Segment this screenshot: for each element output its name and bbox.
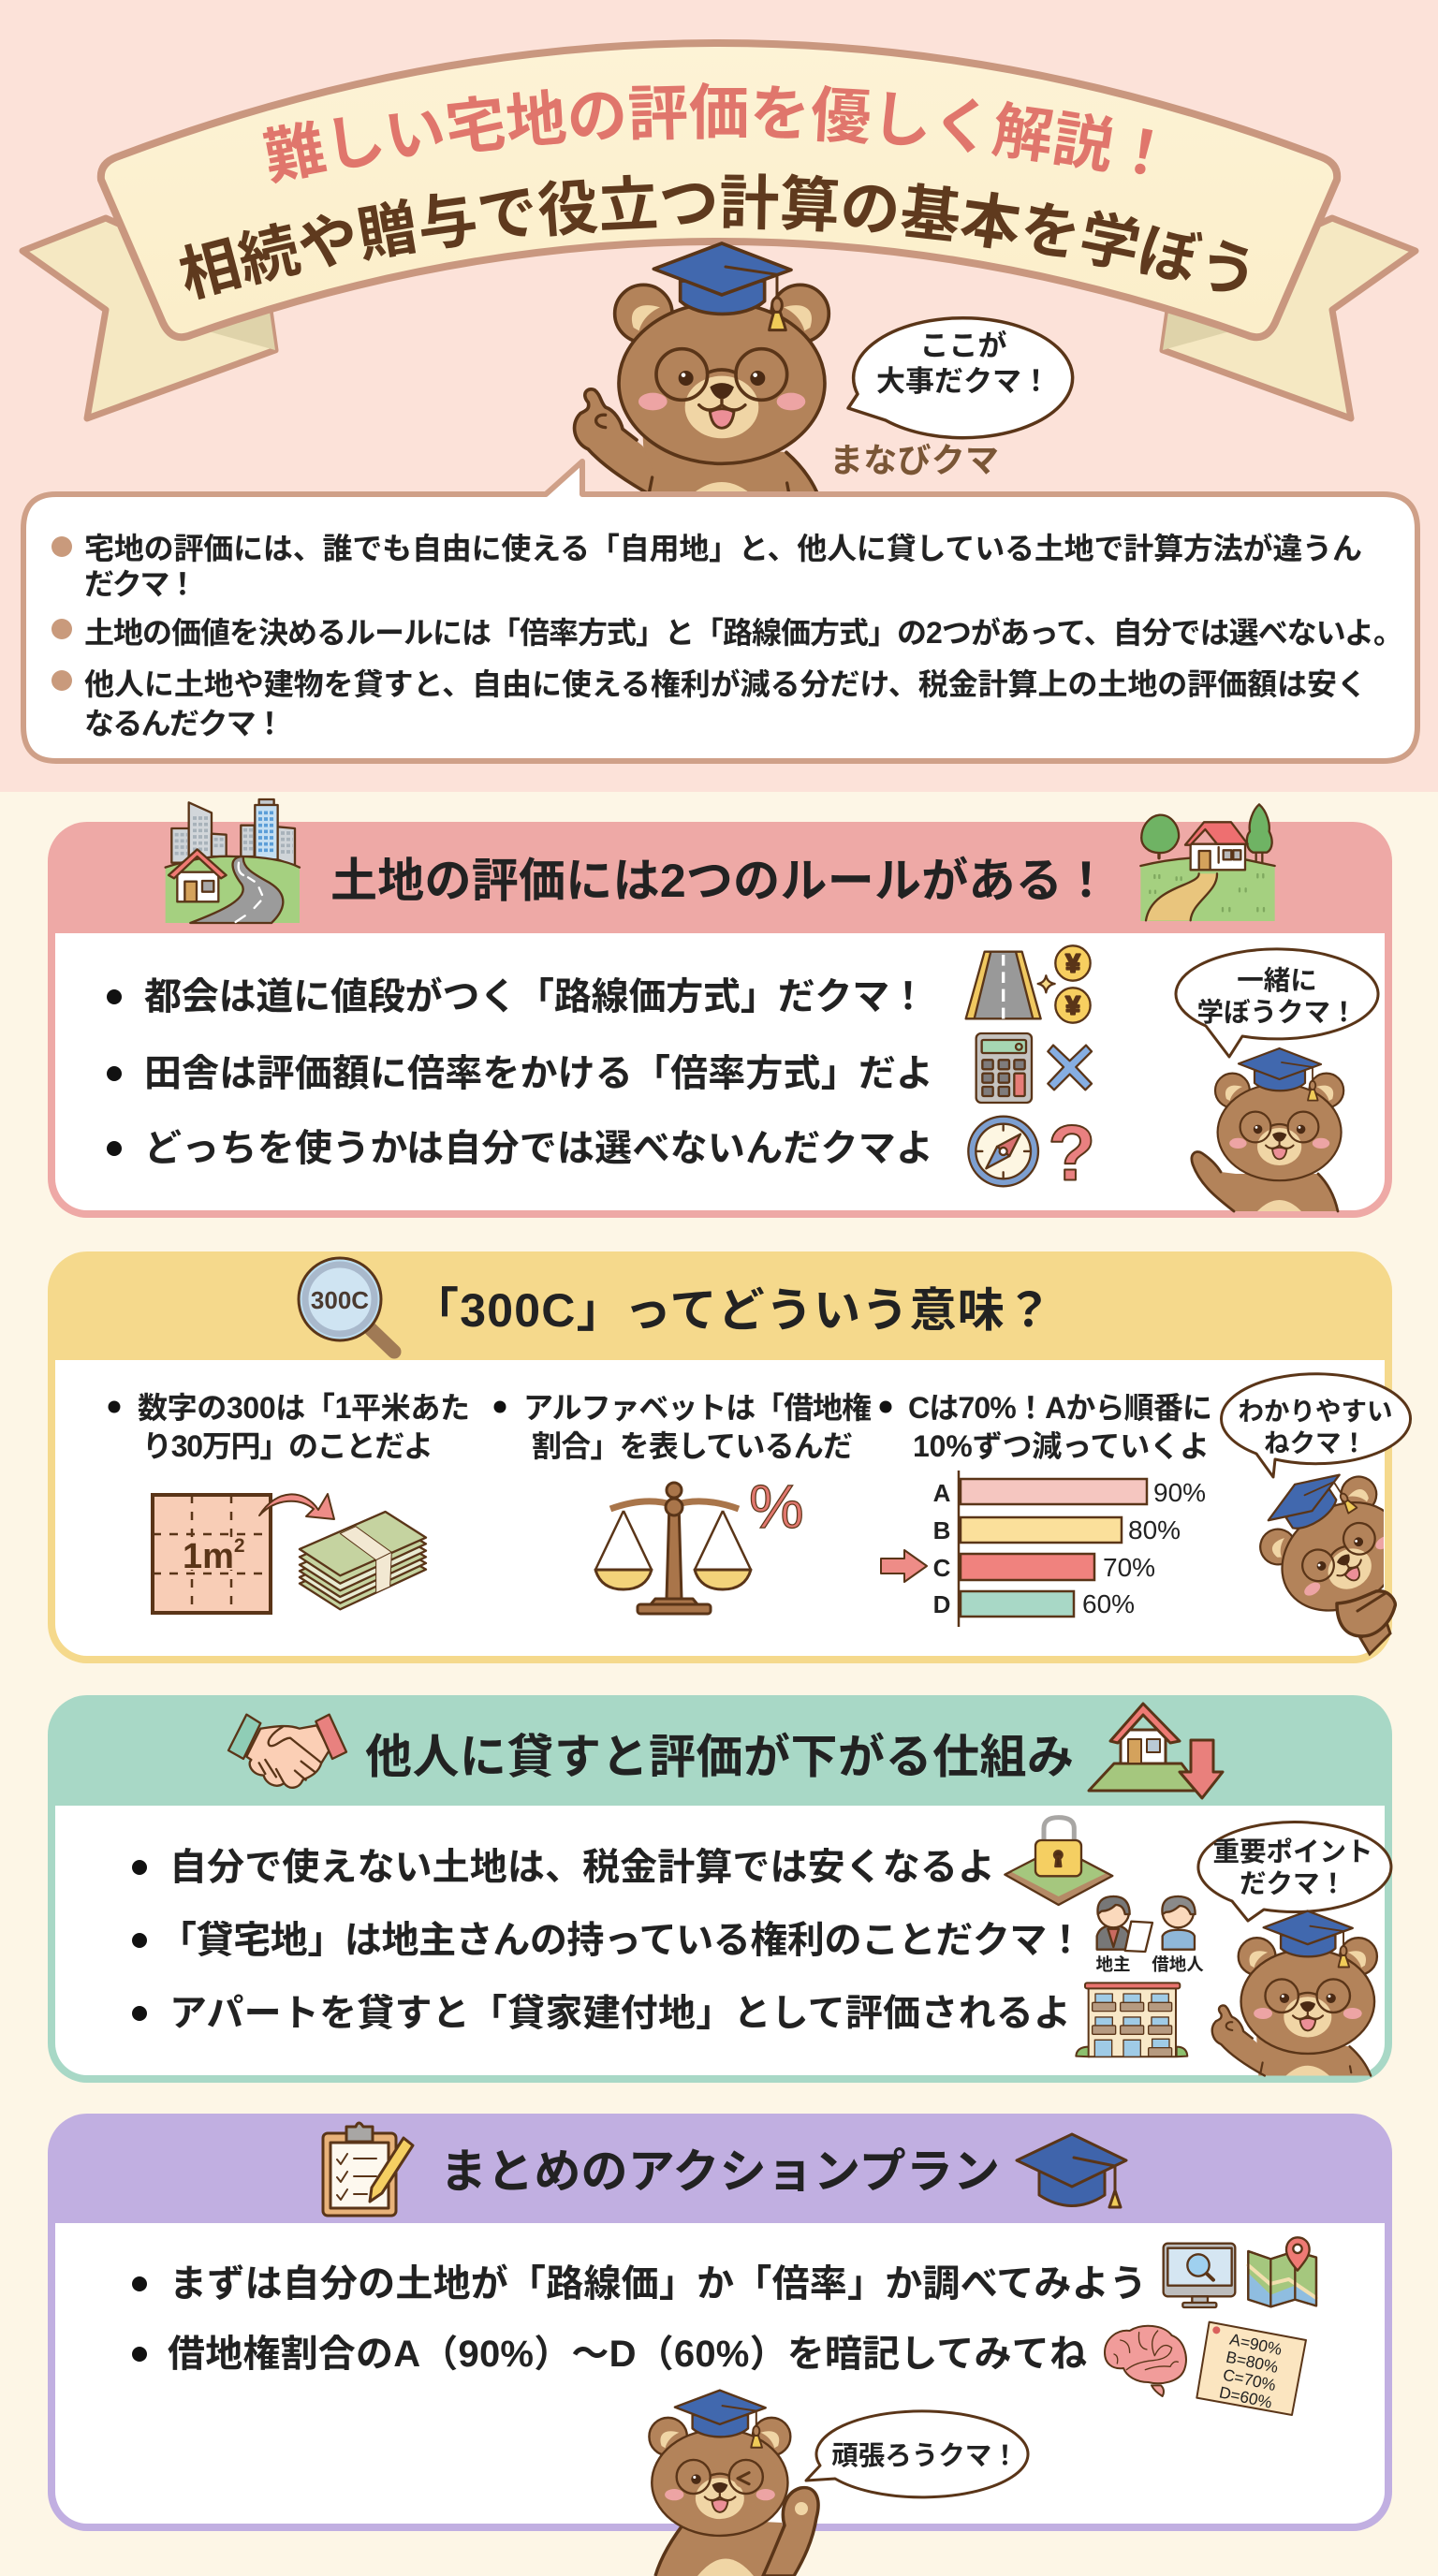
icon: memo note: D=60% [1217, 2382, 1274, 2412]
column: ratio chart: 10%ずつ減っていくよ [913, 1429, 1210, 1463]
icon: memo note: C=70% [1221, 2365, 1278, 2394]
banner ribbon [101, 43, 1337, 337]
column: 1 square metre [109, 1391, 470, 1614]
heading: 「300C」ってどういう意味？ [412, 1284, 1052, 1337]
bar chart [933, 1471, 1206, 1627]
bar chart: A [933, 1479, 951, 1507]
column: ratio chart [880, 1391, 1212, 1627]
mascot: winking bear [649, 2391, 818, 2576]
icon: graduation cap [1017, 2134, 1126, 2207]
bullet list [132, 2263, 1147, 2375]
column: scales: アルファベットは「借地権 [523, 1391, 872, 1425]
speech bubble: わかりやすいねクマ [1222, 1374, 1411, 1477]
icon: memo note [1196, 2322, 1306, 2415]
mascot: waving bear [1192, 1048, 1343, 1211]
icon: house value down [1089, 1704, 1223, 1798]
icon: compass with question mark [968, 1110, 1095, 1197]
heading: 他人に貸すと評価が下がる仕組み [365, 1731, 1074, 1783]
heading: 土地の評価には2つのルールがある！ [330, 855, 1109, 907]
icon: landlord and tenant [1095, 1896, 1204, 1974]
bar chart: 90% [1153, 1478, 1206, 1507]
illustration: square metre: 2 [234, 1535, 245, 1557]
icon: memo note: B=80% [1225, 2348, 1280, 2377]
bullet list: 自分で使えない土地は、税金計算では安くなるよ [169, 1847, 995, 1888]
banner right fold [1163, 292, 1260, 350]
panel header and border [48, 2114, 1392, 2531]
bullet list: 都会は道に値段がつく「路線価方式」だクマ！ [144, 976, 927, 1017]
intro point 3 [51, 667, 1367, 740]
icon: landlord and tenant: 地主 [1095, 1954, 1131, 1974]
icon: map pin [1248, 2237, 1316, 2306]
speech bubble: わかりやすいねクマ: わかりやすい [1238, 1397, 1393, 1426]
banner left tail [22, 218, 275, 418]
title line 1: 難しい宅地の評価を優しく解説！ [262, 82, 1153, 183]
intro point 3: なるんだクマ！ [84, 707, 285, 740]
icon: landlord and tenant: 借地人 [1152, 1954, 1204, 1974]
icon: magnifier 300C [299, 1258, 394, 1352]
icon: percent: % [749, 1471, 804, 1541]
column: scales [494, 1391, 872, 1614]
icon: apartment [1076, 1983, 1187, 2056]
intro point 3: 他人に土地や建物を貸すと、自由に使える権利が減る分だけ、税金計算上の土地の評価額は安く [84, 667, 1367, 701]
icon: memo note: A=90% [1228, 2330, 1284, 2359]
speech bubble: ここが大事だクマ: ここが [919, 329, 1007, 362]
panel body [55, 2223, 1385, 2524]
speech bubble: 重要ポイントだクマ: だクマ！ [1240, 1869, 1346, 1899]
mascot: peeking bear [1259, 1473, 1397, 1657]
bar chart: D [933, 1590, 950, 1618]
panel: action plan [48, 2114, 1392, 2576]
panel header and border [48, 822, 1392, 1218]
bullet list: どっちを使うかは自分では選べないんだクマよ [144, 1128, 933, 1169]
bar chart: 70% [1103, 1553, 1155, 1582]
panel body [55, 1806, 1385, 2075]
bullet list: 田舎は評価額に倍率をかける「倍率方式」だよ [144, 1053, 933, 1094]
mascot name: まなびクマ [829, 441, 999, 479]
speech bubble: 頑張ろうクマ [806, 2411, 1028, 2497]
icon: city [166, 799, 300, 923]
bear raised arm [763, 2488, 818, 2576]
illustration: balance scale [595, 1483, 751, 1614]
bullet list [132, 1847, 1084, 2034]
bar chart: 60% [1082, 1589, 1135, 1618]
bullet list: 借地権割合のA（90%）～D（60%）を暗記してみてね [168, 2334, 1087, 2375]
heading: まとめのアクションプラン [440, 2145, 1000, 2198]
banner right tail [1163, 218, 1416, 418]
icon: handshake [228, 1715, 346, 1788]
bar chart: B [933, 1516, 950, 1544]
speech bubble: ここが大事だクマ [848, 318, 1073, 438]
speech bubble: 頑張ろうクマ: 頑張ろうクマ！ [831, 2441, 1019, 2471]
panel: lending lowers valuation [48, 1695, 1392, 2083]
bullet list: アパートを貸すと「貸家建付地」として評価されるよ [169, 1993, 1071, 2034]
column: 1 square metre: り30万円」のことだよ [142, 1429, 433, 1463]
panel header and border [48, 1251, 1392, 1663]
panel body [55, 1360, 1385, 1656]
speech bubble: 一緒に学ぼうクマ [1176, 949, 1378, 1057]
bullet list: 「貸宅地」は地主さんの持っている権利のことだクマ！ [159, 1920, 1084, 1961]
icon: checklist clipboard [323, 2123, 413, 2216]
title banner [19, 39, 1419, 421]
column: scales: 割合」を表しているんだ [532, 1429, 853, 1463]
mascot: pointing bear [1212, 1910, 1377, 2076]
panel body [55, 933, 1385, 1210]
bullet list: まずは自分の土地が「路線価」か「倍率」か調べてみよう [169, 2263, 1147, 2305]
illustration: square metre [153, 1495, 271, 1614]
mascot: main bear [575, 243, 829, 498]
panel header and border [48, 1695, 1392, 2083]
bullet list [107, 976, 933, 1169]
bar chart: 80% [1128, 1515, 1181, 1544]
arrow: to money [259, 1494, 334, 1519]
speech bubble: 重要ポイントだクマ: 重要ポイント [1212, 1837, 1373, 1867]
panel: 300C meaning [48, 1251, 1424, 1663]
speech bubble: 重要ポイントだクマ [1198, 1822, 1391, 1921]
speech bubble: 一緒に学ぼうクマ: 一緒に [1237, 966, 1317, 996]
icon: compass with question mark: ? [1048, 1110, 1095, 1197]
panel: 2 rules [48, 799, 1392, 1218]
intro point 1 [51, 532, 1362, 601]
panel: intro summary [23, 461, 1417, 761]
intro point 1: だクマ！ [84, 567, 198, 601]
icon: lock on land [1005, 1818, 1112, 1905]
illustration: square metre: 1m [183, 1537, 234, 1576]
intro speech panel shape [23, 461, 1417, 761]
bar chart: C [933, 1554, 951, 1582]
column: ratio chart: Cは70%！Aから順番に [908, 1391, 1212, 1425]
title line 2: 相続や贈与で役立つ計算の基本を学ぼう [180, 173, 1249, 300]
icon: computer search [1164, 2244, 1235, 2307]
banner left fold [178, 292, 275, 350]
illustration: money stack [300, 1512, 426, 1609]
speech bubble: ここが大事だクマ: 大事だクマ！ [876, 365, 1050, 398]
icon: road with yen coins [966, 945, 1091, 1023]
icon: brain [1105, 2326, 1186, 2396]
speech bubble: 一緒に学ぼうクマ: 学ぼうクマ！ [1196, 998, 1357, 1028]
arrow: to C [881, 1550, 927, 1582]
intro point 2: 土地の価値を決めるルールには「倍率方式」と「路線価方式」の2つがあって、自分では選べないよ。 [84, 616, 1403, 650]
icon: magnifier 300C: 300C [311, 1286, 369, 1314]
column: 1 square metre: 数字の300は「1平米あた [138, 1391, 470, 1425]
icon: road with yen coins: ¥ [1065, 948, 1080, 977]
intro point 1: 宅地の評価には、誰でも自由に使える「自用地」と、他人に貸している土地で計算方法が違うん [84, 532, 1362, 565]
speech bubble: わかりやすいねクマ: ねクマ！ [1264, 1428, 1367, 1457]
icon: countryside [1140, 804, 1275, 921]
icon: calculator with multiply sign [976, 1033, 1092, 1103]
icon: road with yen coins: ¥ [1065, 990, 1080, 1019]
